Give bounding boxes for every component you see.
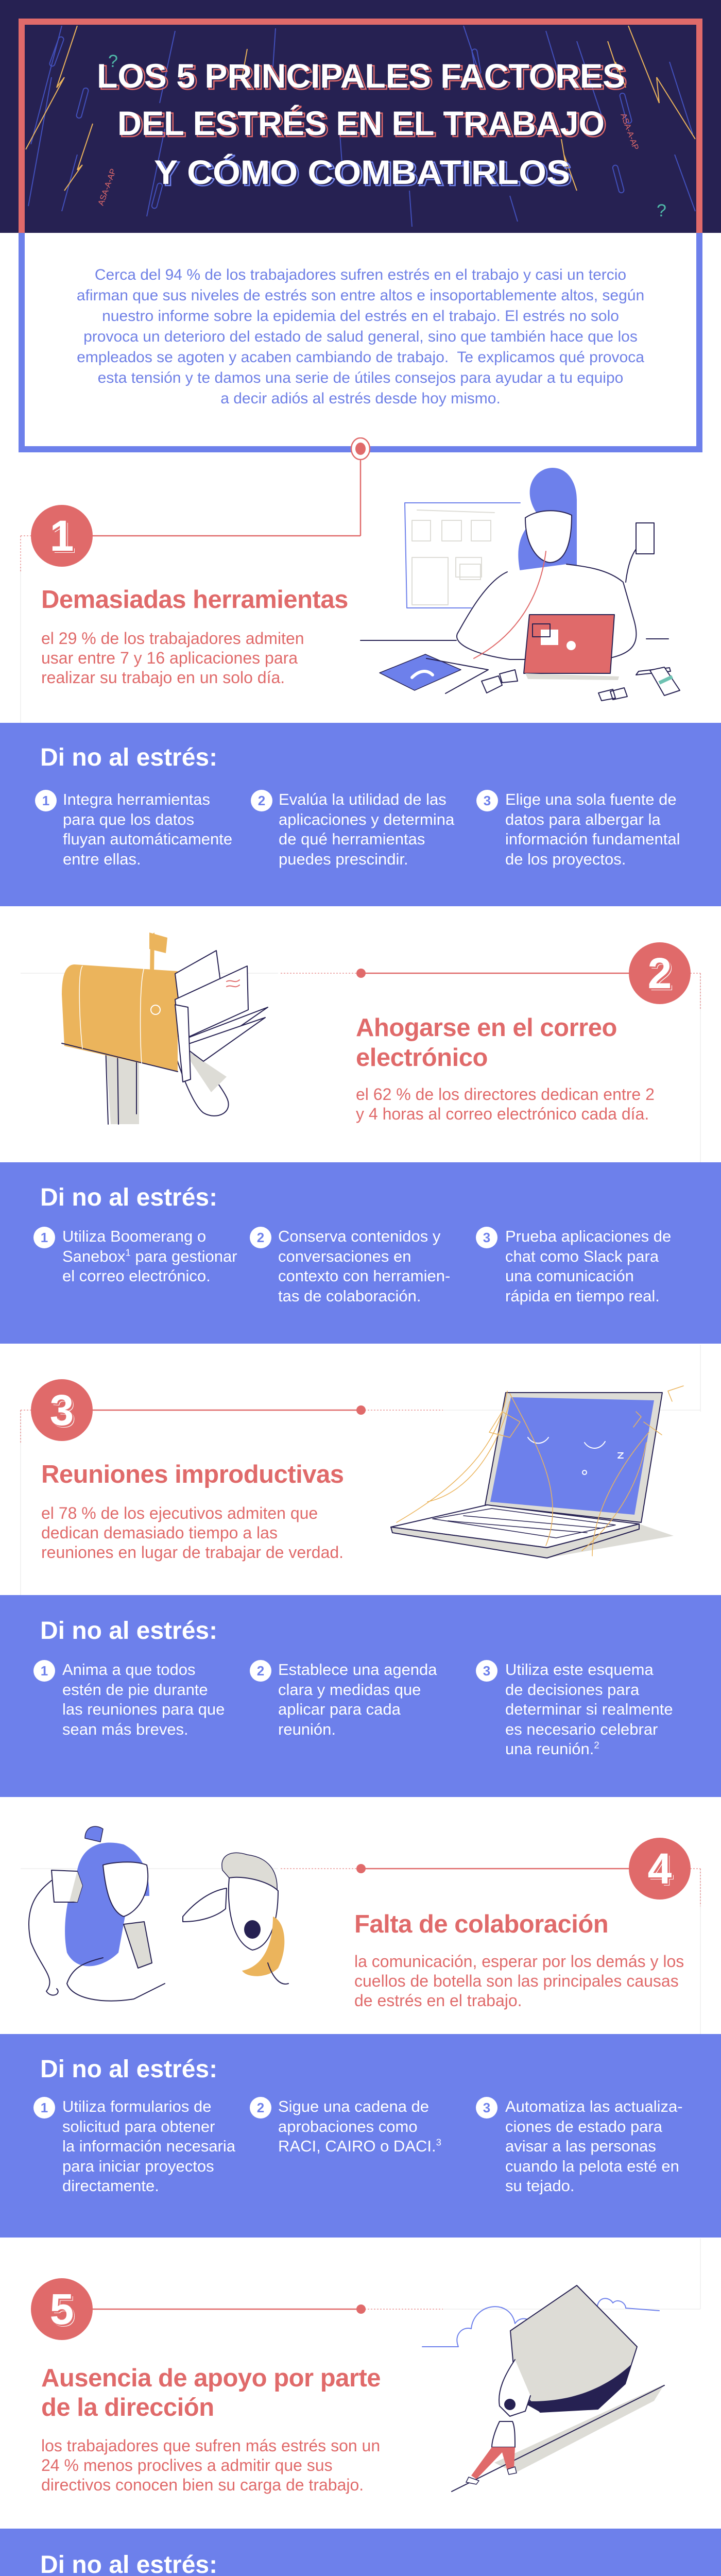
tip 4.1: 1 <box>41 2100 48 2115</box>
illustration: two people with can telephones <box>28 1826 289 2002</box>
intro text: Cerca del 94 % de los trabajadores sufren estrés en el trabajo y casi un tercio <box>95 266 626 283</box>
tip 4.3: 3 <box>483 2100 490 2115</box>
tip 1.3: información fundamental <box>505 830 680 848</box>
tip 1.2: Evalúa la utilidad de las <box>279 790 447 808</box>
tip 4.1: la información necesaria <box>62 2137 235 2155</box>
heading: di no al estrés 4: Di no al estrés: <box>40 2056 217 2083</box>
tip 3.3: es necesario celebrar <box>505 1720 658 1738</box>
badge: 1: 1 <box>50 512 74 560</box>
tip 1.1: fluyan automáticamente <box>63 830 232 848</box>
tip 3.3 <box>476 1660 673 1758</box>
tip 1.1: 1 <box>42 793 49 808</box>
tip 2.1: Utiliza Boomerang o <box>62 1227 206 1245</box>
tip 1.2: aplicaciones y determina <box>279 810 454 828</box>
tip 1.1: para que los datos <box>63 810 194 828</box>
heading: Ahogarse en el correo electrónico <box>356 1014 617 1072</box>
heading: Falta de colaboración: Falta de colaboración <box>354 1910 608 1938</box>
stat text 3: dedican demasiado tiempo a las <box>41 1523 278 1542</box>
tip 3.3: de decisiones para <box>505 1681 639 1698</box>
tip 4.1: solicitud para obtener <box>62 2117 215 2135</box>
tip 1.1 <box>35 790 232 868</box>
tip 2.3 <box>476 1227 671 1304</box>
tip 2.1: el correo electrónico. <box>62 1267 211 1285</box>
tip 4.3: ciones de estado para <box>505 2117 662 2135</box>
stat text 2 <box>356 1085 655 1123</box>
decorative rain lines: ? <box>108 52 118 71</box>
badge: 4 <box>629 1838 691 1900</box>
heading: Ausencia de apoyo por parte de la dirección: de la dirección <box>41 2394 214 2421</box>
badge: 5: 5 <box>50 2285 74 2333</box>
title: Y CÓMO COMBATIRLOS <box>156 155 572 193</box>
stat text 2: y 4 horas al correo electrónico cada día. <box>356 1105 649 1123</box>
badge: 3 <box>31 1379 93 1441</box>
tip 3.1 <box>33 1660 225 1738</box>
badge: 2 <box>629 942 691 1004</box>
title: LOS 5 PRINCIPALES FACTORES <box>97 57 625 95</box>
tip 4.3: Automatiza las actualiza- <box>505 2097 683 2115</box>
tip 4.3: avisar a las personas <box>505 2137 656 2155</box>
tip 4.2: 2 <box>257 2100 264 2115</box>
illustration: stressed woman at laptop <box>360 468 680 701</box>
tip 1.1: entre ellas. <box>63 850 141 868</box>
heading: di no al estrés 2: Di no al estrés: <box>40 1184 217 1211</box>
tip 3.2: Establece una agenda <box>278 1660 437 1679</box>
tip 1.2: de qué herramientas <box>279 830 425 848</box>
stat text 3 <box>41 1504 344 1562</box>
badge: 5 <box>31 2278 93 2340</box>
stat text 5 <box>41 2436 380 2494</box>
title: LOS 5 PRINCIPALES FACTORES <box>99 58 627 96</box>
tip 3.1: las reuniones para que <box>62 1700 225 1718</box>
stat text 1: usar entre 7 y 16 aplicaciones para <box>41 649 298 667</box>
intro text: nuestro informe sobre la epidemia del estrés en el trabajo. El estrés no solo <box>102 308 619 325</box>
heading: Ausencia de apoyo por parte de la dirección <box>41 2364 381 2421</box>
stat text 3: el 78 % de los ejecutivos admiten que <box>41 1504 318 1522</box>
tip 1.2 <box>251 790 454 868</box>
title: DEL ESTRÉS EN EL TRABAJO <box>117 104 605 142</box>
tip 3.2: aplicar para cada <box>278 1700 401 1718</box>
stat text 4 <box>354 1952 684 2010</box>
illustration: overflowing mailbox <box>61 933 268 1125</box>
intro text: empleados se agoten y acaben cambiando de trabajo. Te explicamos qué provoca <box>77 349 644 366</box>
decorative rain lines: ASA-A-AP <box>619 112 640 151</box>
tip 2.2: 2 <box>257 1230 264 1245</box>
tip 4.1: directamente. <box>62 2177 159 2195</box>
illustration: sleeping laptop with cobwebs <box>390 1385 684 1558</box>
tip 1.3: 3 <box>484 793 491 808</box>
heading: Demasiadas herramientas: Demasiadas herramientas <box>41 586 348 614</box>
tip 2.2 <box>250 1227 450 1304</box>
intro text: esta tensión y te damos una serie de útiles consejos para ayudar a tu equipo <box>98 369 623 386</box>
tip 3.1: 1 <box>41 1663 48 1679</box>
intro text: provoca un deterioro del estado de salud general, sino que también hace que los <box>83 328 638 345</box>
tip 3.1: Anima a que todos <box>62 1660 196 1679</box>
tip 4.2 <box>250 2097 441 2155</box>
intro text: a decir adiós al estrés desde hoy mismo. <box>220 390 501 407</box>
header background <box>0 0 721 233</box>
tip 2.1: 1 <box>41 1230 48 1245</box>
frame: red top part <box>19 19 702 233</box>
tip 2.2: conversaciones en <box>278 1247 411 1265</box>
heading: Reuniones improductivas: Reuniones improductivas <box>41 1461 344 1488</box>
heading: di no al estrés 3: Di no al estrés: <box>40 1617 217 1645</box>
tip 4.2: Sigue una cadena de <box>278 2097 429 2115</box>
tip 1.2: 2 <box>258 793 265 808</box>
tip 3.2: 2 <box>257 1663 264 1679</box>
panel: tips 5 <box>0 2529 721 2576</box>
tip 4.3: su tejado. <box>505 2177 574 2195</box>
stat text 4: la comunicación, esperar por los demás y los <box>354 1952 684 1971</box>
tip 4.1 <box>33 2097 235 2195</box>
tip 3.3: una reunión.2 <box>505 1740 599 1758</box>
tip 2.3: una comunicación <box>505 1267 634 1285</box>
panel: tips 1 <box>0 723 721 906</box>
heading: Ahogarse en el correo electrónico: electrónico <box>356 1044 488 1072</box>
tip 2.3: 3 <box>483 1230 490 1245</box>
tip 2.2: Conserva contenidos y <box>278 1227 440 1245</box>
stat text 4: de estrés en el trabajo. <box>354 1991 522 2010</box>
stat text 4: cuellos de botella son las principales causas <box>354 1972 679 1990</box>
tip 2.3: chat como Slack para <box>505 1247 659 1265</box>
tip 1.3: Elige una sola fuente de <box>505 790 677 808</box>
heading: Ausencia de apoyo por parte de la dirección: Ausencia de apoyo por parte <box>41 2364 381 2392</box>
title <box>97 57 627 193</box>
decorative rain lines: ASA-A-AP <box>97 167 118 207</box>
heading: Ahogarse en el correo electrónico: Ahogarse en el correo <box>356 1014 617 1042</box>
stat text 3: reuniones en lugar de trabajar de verdad. <box>41 1543 344 1562</box>
tip 2.1 <box>33 1227 237 1285</box>
stat text 5: los trabajadores que sufren más estrés son un <box>41 2436 380 2455</box>
tip 3.3: 3 <box>483 1663 490 1679</box>
title: Y CÓMO COMBATIRLOS <box>154 153 570 191</box>
tip 2.3: rápida en tiempo real. <box>505 1287 660 1304</box>
node circle on frame <box>350 437 371 460</box>
intro text: afirman que sus niveles de estrés son entre altos e insoportablemente altos, según <box>77 287 644 304</box>
badge: 2: 2 <box>648 949 672 997</box>
tip 3.2: clara y medidas que <box>278 1681 421 1698</box>
badge: 4: 4 <box>648 1844 672 1893</box>
panel: tips 3 <box>0 1595 721 1797</box>
decorative rain lines: ? <box>657 201 666 221</box>
title: DEL ESTRÉS EN EL TRABAJO <box>119 106 607 144</box>
heading: di no al estrés 1: Di no al estrés: <box>40 744 217 771</box>
tip 3.1: sean más breves. <box>62 1720 188 1738</box>
badge: 3: 3 <box>50 1386 74 1434</box>
tip 2.2: tas de colaboración. <box>278 1287 421 1304</box>
tip 1.1: Integra herramientas <box>63 790 210 808</box>
tip 1.3: de los proyectos. <box>505 850 626 868</box>
stat text 1: el 29 % de los trabajadores admiten <box>41 629 304 648</box>
decorative rain lines <box>25 26 696 227</box>
tip 2.2: contexto con herramien- <box>278 1267 450 1285</box>
tip 4.3 <box>476 2097 683 2195</box>
tip 4.3: cuando la pelota esté en <box>505 2157 679 2175</box>
tip 3.2: reunión. <box>278 1720 336 1738</box>
tip 4.1: Utiliza formularios de <box>62 2097 211 2115</box>
tip 3.1: estén de pie durante <box>62 1681 208 1698</box>
stat text 1: realizar su trabajo en un solo día. <box>41 668 285 687</box>
stat text 5: directivos conocen bien su carga de trabajo. <box>41 2476 364 2494</box>
tip 1.2: puedes prescindir. <box>279 850 408 868</box>
tip 2.1: Sanebox1 para gestionar <box>62 1247 237 1265</box>
badge: 1 <box>31 505 93 567</box>
tip 3.3: Utiliza este esquema <box>505 1660 654 1679</box>
tip 1.3: datos para albergar la <box>505 810 661 828</box>
stat text 5: 24 % menos proclives a admitir que sus <box>41 2456 333 2475</box>
tip 1.3 <box>476 790 680 868</box>
panel: tips 2 <box>0 1162 721 1344</box>
tip 2.3: Prueba aplicaciones de <box>505 1227 671 1245</box>
stat text 2: el 62 % de los directores dedican entre 2 <box>356 1085 655 1104</box>
intro text <box>77 266 644 407</box>
tip 4.2: RACI, CAIRO o DACI.3 <box>278 2137 441 2155</box>
stat text 1 <box>41 629 304 687</box>
tip 4.1: para iniciar proyectos <box>62 2157 214 2175</box>
tip 4.2: aprobaciones como <box>278 2117 418 2135</box>
frame: blue bottom part <box>19 233 702 452</box>
tip 3.3: determinar si realmente <box>505 1700 673 1718</box>
panel: tips 4 <box>0 2034 721 2238</box>
tip 3.2 <box>250 1660 437 1738</box>
